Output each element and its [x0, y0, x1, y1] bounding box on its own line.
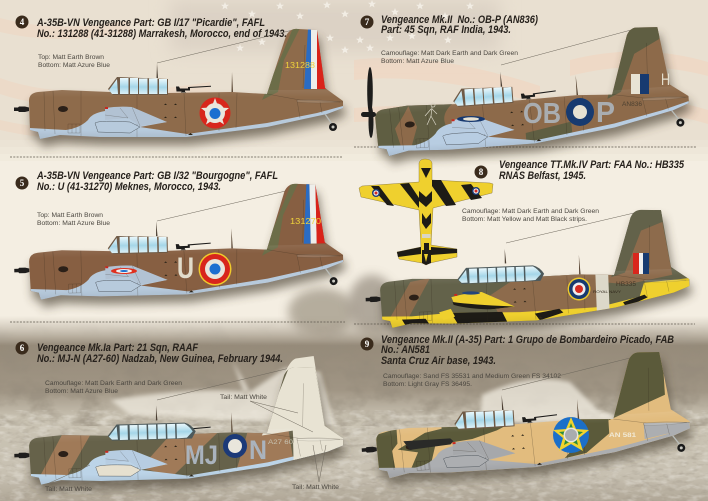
title 9: No.: AN581: [381, 344, 430, 356]
serial 6: A27 60: [268, 439, 293, 446]
badge 5: 5: [20, 178, 25, 188]
serial 7: AN836: [622, 101, 643, 108]
title 5: A-35B-VN Vengeance Part: GB I/32 "Bourgogne", FAFL: [36, 170, 278, 182]
top-view plan of aircraft 8: [359, 159, 493, 265]
badge 7: 7: [365, 17, 370, 27]
camouflage note 7: [381, 50, 519, 65]
wing roundel 8: [462, 291, 480, 295]
fin flash 8: [633, 253, 649, 274]
panel: aircraft 8: [359, 159, 693, 337]
fin letter H: H: [661, 70, 670, 89]
tail note upper: Tail: Matt White: [220, 394, 268, 401]
camouflage note 8: Bottom: Matt Yellow and Matt Black strips.: [462, 216, 587, 223]
code letter U: U: [177, 252, 194, 285]
camouflage note 4: Bottom: Matt Azure Blue: [38, 62, 111, 69]
badge 4: 4: [20, 17, 25, 27]
camouflage note 4: [38, 54, 111, 69]
leader line 7: [501, 30, 631, 65]
aircraft 4 profile: [14, 28, 345, 147]
aircraft 5 profile: [12, 182, 346, 308]
badge 8: [474, 166, 488, 178]
camouflage note 6: [45, 380, 183, 395]
wing roundel 7: [457, 116, 485, 122]
tail note right: Tail: Matt White: [292, 484, 340, 491]
panel: aircraft 7: [360, 14, 694, 165]
brazilian roundel: [553, 417, 589, 453]
fuselage code MJ: MJ: [185, 440, 218, 470]
serial 8: HB335: [616, 281, 636, 288]
royal navy lettering: ROYAL NAVY: [593, 290, 622, 294]
title 9: [381, 334, 674, 367]
camouflage note 9: [383, 373, 562, 388]
fuselage code OB: OB: [523, 98, 561, 130]
camouflage note 8: [462, 208, 600, 223]
aircraft 8 profile: [363, 207, 693, 337]
RAAF roundel: [223, 434, 247, 458]
tail note left: Tail: Matt White: [45, 486, 93, 493]
title 5: No.: U (41-31270) Meknes, Morocco, 1943.: [37, 181, 221, 193]
badge 9: [360, 338, 374, 350]
camouflage note 4: Top: Matt Earth Brown: [38, 54, 105, 61]
camouflage note 5: Bottom: Matt Azure Blue: [37, 220, 111, 227]
camouflage note 5: Top: Matt Earth Brown: [37, 212, 104, 219]
RAF roundel 7: [566, 98, 594, 126]
badge 8: 8: [479, 167, 484, 177]
leader line 9: [502, 357, 634, 390]
camouflage note 9: Camouflage: Sand FS 35531 and Medium Green FS 34102: [383, 373, 562, 380]
camouflage note 7: Bottom: Matt Azure Blue: [381, 58, 455, 65]
badge 9: 9: [365, 339, 370, 349]
camouflage note 5: [37, 212, 111, 227]
leader line 6: [157, 368, 290, 400]
roundel 5: [198, 252, 232, 286]
badge 7: [360, 16, 374, 28]
camouflage note 7: Camouflage: Matt Dark Earth and Dark Green: [381, 50, 519, 57]
title 4: A-35B-VN Vengeance Part: GB I/17 "Picardie", FAFL: [36, 17, 265, 29]
title 9: Santa Cruz Air base, 1943.: [381, 355, 496, 367]
leader line 4: [157, 30, 293, 63]
title 8: RNAS Belfast, 1945.: [499, 170, 586, 182]
divider lines: [10, 147, 696, 324]
camouflage note 8: Camouflage: Matt Dark Earth and Dark Green: [462, 208, 600, 215]
title 7: Part: 45 Sqn, RAF India, 1943.: [381, 24, 511, 36]
fin flash 7: [631, 74, 649, 94]
leader line 5: [157, 190, 290, 221]
title 6: Vengeance Mk.Ia Part: 21 Sqn, RAAF: [37, 342, 198, 354]
leader line 8: [506, 213, 634, 243]
camouflage note 9: Bottom: Light Gray FS 36495.: [383, 381, 472, 388]
badge 5: [16, 176, 28, 190]
camouflage note 6: Bottom: Matt Azure Blue: [45, 388, 119, 395]
serial 9: AN 581: [609, 432, 636, 439]
roundel 8: [568, 278, 590, 300]
panel: aircraft 4: [14, 16, 345, 147]
panel: aircraft 9: [357, 334, 695, 488]
background: american flag wash: [0, 0, 708, 161]
panel: aircraft 6: [12, 342, 351, 493]
title 5: [36, 170, 278, 193]
serial 4: 131288: [285, 60, 315, 70]
title 4: [36, 17, 287, 40]
title 7: [381, 14, 538, 36]
background: sepia airfield photograph: [0, 275, 708, 501]
roundel 4: [200, 98, 230, 128]
camouflage note 6: Camouflage: Matt Dark Earth and Dark Green: [45, 380, 183, 387]
title 6: [37, 342, 283, 365]
badge 4: [16, 16, 28, 28]
panel: aircraft 5: [12, 170, 346, 308]
serial 5: 131270: [290, 216, 321, 226]
title 8: [499, 159, 685, 182]
fuselage code N: N: [249, 435, 267, 465]
wing roundel 5: [111, 268, 137, 274]
propeller: [361, 67, 376, 138]
badge 6: [16, 342, 28, 354]
badge 6: 6: [20, 343, 25, 353]
aircraft 9 profile: [357, 345, 695, 488]
nose art figure: [425, 103, 437, 125]
aircraft 7 profile: [366, 23, 694, 165]
tail leader lines: [47, 401, 326, 484]
aircraft 6 profile: [12, 355, 351, 493]
title 7: Vengeance Mk.II No.: OB-P (AN836): [381, 14, 538, 26]
title 4: No.: 131288 (41-31288) Marrakesh, Morocco, end of 1943.: [37, 28, 287, 40]
fuselage code P: P: [596, 97, 615, 129]
title 6: No.: MJ-N (A27-60) Nadzab, New Guinea, February 1944.: [37, 353, 283, 365]
